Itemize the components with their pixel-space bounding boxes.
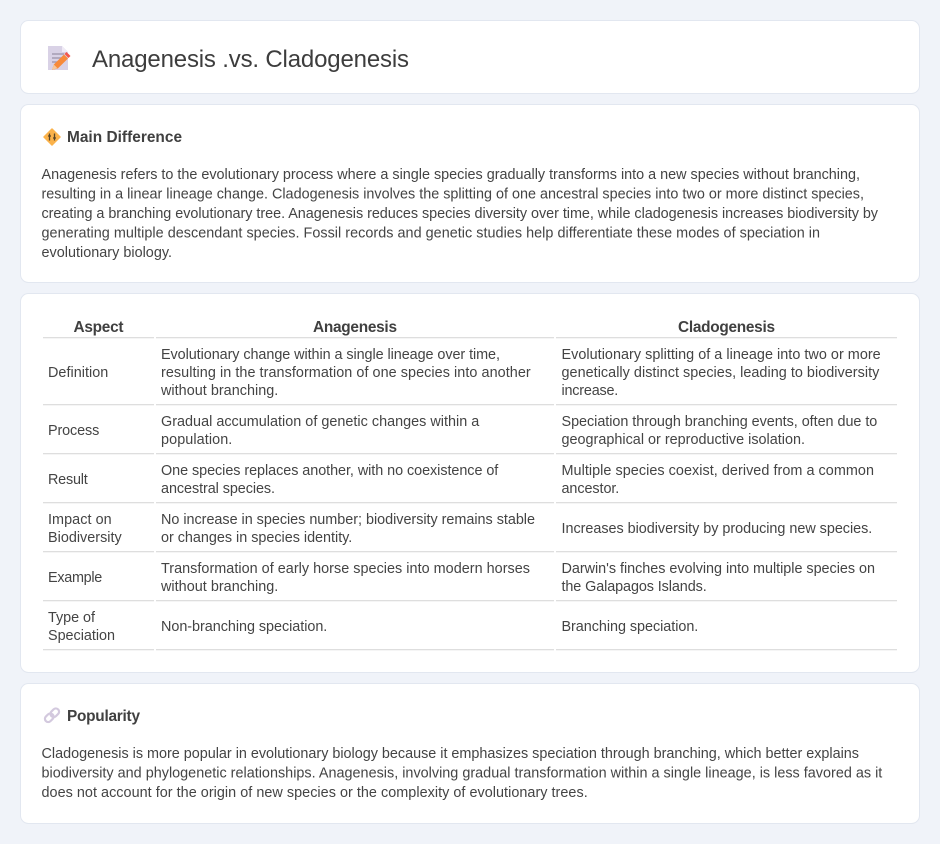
table row: result: Result [48,472,88,488]
table row: process: geographical or reproductive isolation. [562,432,805,448]
text block: popularity [42,746,882,801]
text block: main difference: resulting in a linear lineage change. Cladogenesis involves the splitting of one ancestral species into two or more distinct species, [42,186,864,202]
table row: type of speciation: Branching speciation. [562,619,698,635]
table row: definition [48,347,881,399]
title: Anagenesis .vs. Cladogenesis [92,46,409,73]
table row: type of speciation: Type of [48,610,96,626]
table row: definition: Evolutionary splitting of a lineage into two or more [562,347,881,363]
text block: popularity: does not account for the origin of new species or the complexity of evolutionary trees. [42,785,588,801]
panel: main difference [20,104,920,282]
text block: main difference [42,167,879,261]
icon: link [44,707,60,723]
table row: definition: Definition [48,365,108,381]
text block: main difference: Anagenesis refers to the evolutionary process where a single species gradually transforms into a new species without branching, [42,167,860,183]
panel: popularity [20,684,920,824]
table row: definition: genetically distinct species, leading to biodiversity [562,365,880,381]
icon: document with pencil [48,46,70,70]
table row: type of speciation: Speciation [48,628,115,644]
table header row: Cladogenesis [678,319,775,336]
heading: main difference: Main Difference [67,129,182,146]
table row: process: Gradual accumulation of genetic changes within a [161,414,479,430]
table row: impact on biodiversity: Biodiversity [48,530,122,546]
table row: example: Transformation of early horse species into modern horses [161,561,530,577]
panel: title header [20,20,920,94]
table row: type of speciation: Non-branching speciation. [161,619,327,635]
table header row [74,319,775,336]
table row: result: ancestor. [562,481,619,497]
text block: main difference: generating multiple descendant species. Fossil records and genetic studies help differentiate these modes of speciation in [42,226,820,242]
panel: comparison table [20,294,920,672]
table row: definition: increase. [562,383,618,399]
text block: popularity: biodiversity and phylogenetic relationships. Anagenesis, involving gradual transformation within a single lineage, is less favored as it [42,766,882,782]
table row: definition: without branching. [160,383,278,399]
table row: result: Multiple species coexist, derived from a common [562,463,874,479]
heading: popularity: Popularity [67,708,140,725]
table row: process [48,414,877,448]
table row: impact on biodiversity: Impact on [48,512,112,528]
table row: result: One species replaces another, with no coexistence of [161,463,499,479]
text block: popularity: Cladogenesis is more popular in evolutionary biology because it emphasizes speciation through branching, which better explains [42,746,859,762]
table row: impact on biodiversity: No increase in species number; biodiversity remains stable [161,512,535,528]
table row: type of speciation [48,610,698,644]
table row: example: Example [48,570,102,586]
table row: example [48,561,875,595]
table row: process: Speciation through branching events, often due to [562,414,877,430]
table row: example: without branching. [160,579,278,595]
table row: result [48,463,874,497]
table row: definition: Evolutionary change within a single lineage over time, [161,347,500,363]
table row: definition: resulting in the transformation of one species into another [161,365,531,381]
table row: impact on biodiversity: or changes in species identity. [161,530,352,546]
text block: main difference: evolutionary biology. [42,245,172,261]
table header row: Aspect [74,319,124,336]
table row: example: the Galapagos Islands. [562,579,707,595]
table row: process: Process [48,423,99,439]
table row: impact on biodiversity [48,512,872,546]
table row: example: Darwin's finches evolving into multiple species on [562,561,875,577]
table row: result: ancestral species. [161,481,275,497]
icon: warning diamond [44,129,60,145]
table row: impact on biodiversity: Increases biodiversity by producing new species. [562,521,872,537]
table row: process: population. [161,432,232,448]
table header row: Anagenesis [313,319,397,336]
text block: main difference: creating a branching evolutionary tree. Anagenesis reduces species diversity over time, while cladogenesis increases biodiversity by [42,206,879,222]
